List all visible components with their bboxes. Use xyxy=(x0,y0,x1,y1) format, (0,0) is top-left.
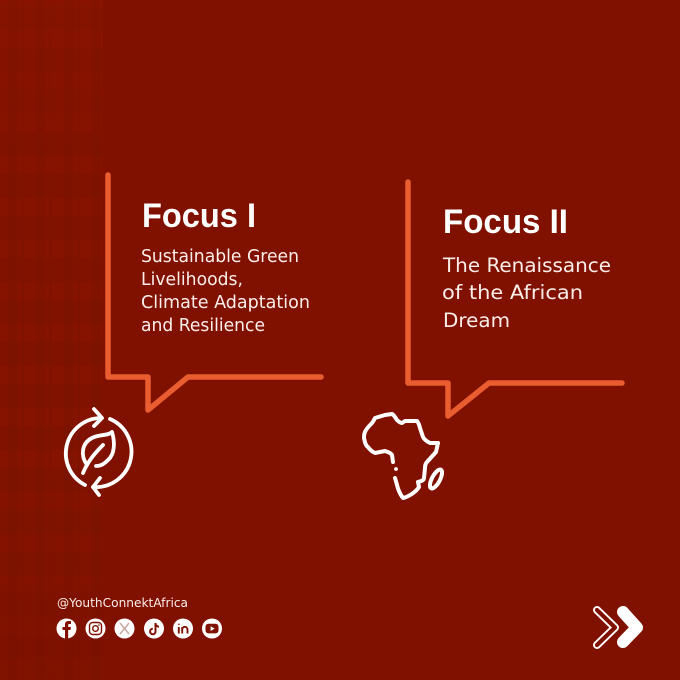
icon: linkedin xyxy=(173,618,193,638)
text block: Focus I description: Sustainable Green xyxy=(141,247,299,267)
panel: Focus I xyxy=(108,175,321,410)
text block: Focus I description: Climate Adaptation xyxy=(141,293,310,313)
speech bubble outline: Focus II xyxy=(408,182,622,416)
heading: Focus I: Focus I xyxy=(142,197,256,235)
icon: youtube xyxy=(202,618,222,638)
icon: map of Africa xyxy=(364,414,444,498)
text block: Focus II description xyxy=(442,254,611,332)
icon: tiktok xyxy=(144,618,164,638)
icon: instagram xyxy=(86,618,106,638)
heading: Focus II: Focus II xyxy=(443,203,568,241)
social icons row xyxy=(56,618,222,638)
text block: Focus II description: The Renaissance xyxy=(442,254,611,277)
text block: Focus I description: and Resilience xyxy=(141,316,265,336)
icon: facebook xyxy=(56,618,76,638)
text block: Focus I description: Livelihoods, xyxy=(141,270,243,290)
panel: Focus II xyxy=(408,182,622,416)
speech bubble outline: Focus I xyxy=(108,175,321,410)
text block: Focus I description xyxy=(141,247,310,336)
icon: recycling arrows around leaf xyxy=(66,409,132,495)
icon: X xyxy=(114,618,134,638)
social handle: @YouthConnektAfrica xyxy=(57,596,188,610)
text block: Focus II description: of the African xyxy=(442,281,583,304)
icon: double chevron arrow xyxy=(597,610,637,645)
text block: Focus II description: Dream xyxy=(443,309,510,332)
